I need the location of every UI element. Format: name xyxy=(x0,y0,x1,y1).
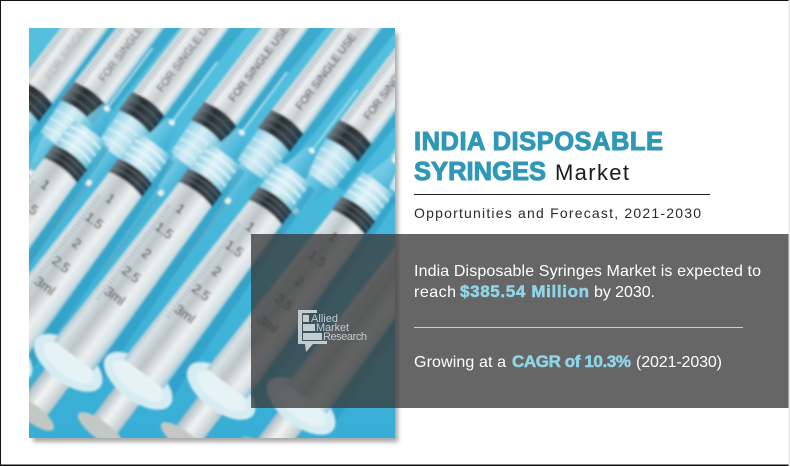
title: SYRINGES xyxy=(414,158,546,186)
lower syringes: 2.5 xyxy=(272,291,296,314)
lower syringes: 3ml xyxy=(102,283,128,309)
panel rule xyxy=(414,327,743,328)
market size statement xyxy=(414,263,761,301)
lower syringes: 1 xyxy=(243,219,258,235)
lower syringes: 1.5 xyxy=(305,247,329,270)
lower syringes: 2 xyxy=(139,245,154,262)
logo: Allied Market Research: Allied xyxy=(311,313,338,325)
lower syringes: 1.5 xyxy=(82,209,106,232)
lower syringes: 3ml xyxy=(172,301,198,327)
lower syringes: 1.5 xyxy=(17,195,41,218)
lower syringes: 1 xyxy=(103,191,118,207)
upper syringes: FOR SINGLE USE xyxy=(97,4,162,84)
subtitle: Opportunities and Forecast, 2021-2030 xyxy=(414,205,701,221)
upper syringes xyxy=(29,28,395,286)
lower syringes: 2.5 xyxy=(189,281,213,304)
lower syringes: 2.5 xyxy=(49,253,73,276)
lower syringes: 2 xyxy=(69,235,84,252)
upper syringes: FOR SINGLE USE xyxy=(227,24,292,104)
lower syringes: 1 xyxy=(173,201,188,217)
logo: Allied Market Research: Market xyxy=(316,322,349,334)
CAGR statement: (2021-2030) xyxy=(636,354,722,371)
market size statement: by 2030. xyxy=(594,284,655,301)
photo shadow xyxy=(33,33,398,442)
CAGR statement: CAGR of 10.3% xyxy=(512,352,631,371)
lower syringes: 3ml xyxy=(255,311,281,337)
lower syringes: 1 xyxy=(326,229,341,245)
market size statement: reach xyxy=(414,284,456,301)
title xyxy=(414,128,663,186)
CAGR statement: Growing at a xyxy=(414,354,506,371)
lower syringes: 3ml xyxy=(32,273,58,299)
logo: Allied Market Research xyxy=(298,310,367,352)
upper syringes: FOR SINGLE USE xyxy=(155,14,220,94)
lower syringes: 2.5 xyxy=(119,263,143,286)
upper syringes: FOR SINGLE USE xyxy=(294,32,359,112)
lower syringes xyxy=(29,46,395,438)
market size statement: $385.54 Million xyxy=(460,282,589,301)
lower syringes: 1.5 xyxy=(152,219,176,242)
logo: Allied Market Research: Research xyxy=(323,331,367,343)
stats panel xyxy=(251,234,790,408)
photo: disposable syringes on blue background xyxy=(29,28,395,438)
panel background xyxy=(251,234,790,408)
upper syringes: FOR SINGLE USE xyxy=(43,2,108,82)
title: INDIA DISPOSABLE xyxy=(414,128,663,156)
heading rule xyxy=(414,194,710,195)
lower syringes: 1.5 xyxy=(222,237,246,260)
lower syringes: 2 xyxy=(292,273,307,290)
lower syringes: 2 xyxy=(209,263,224,280)
market size statement: India Disposable Syringes Market is expected to xyxy=(414,263,761,280)
upper syringes: FOR SINGLE USE xyxy=(362,42,427,122)
lower syringes: 2 xyxy=(4,221,19,238)
title: Market xyxy=(555,160,629,185)
lower syringes: 1 xyxy=(38,177,53,193)
CAGR statement xyxy=(414,352,722,371)
